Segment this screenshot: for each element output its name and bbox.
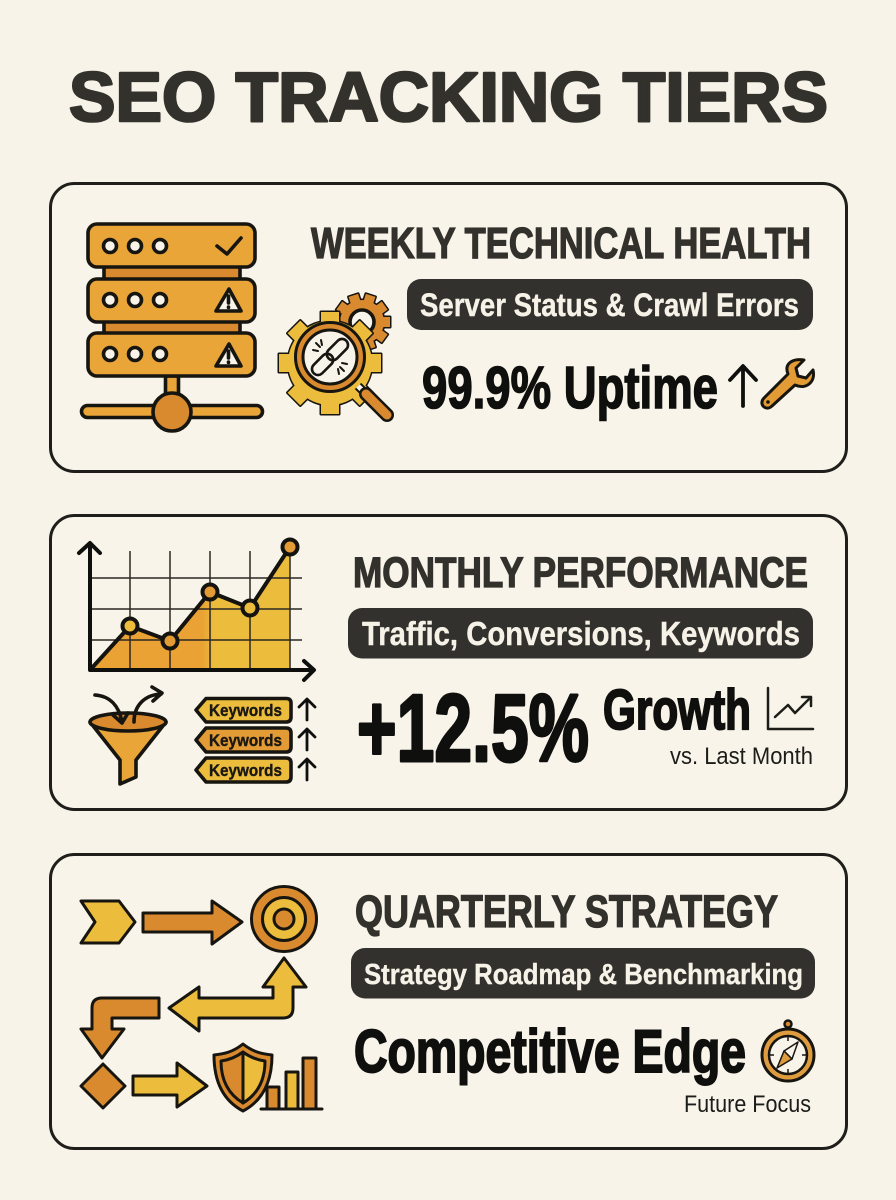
pill: roadmap: Strategy Roadmap & Benchmarking: [364, 959, 803, 991]
icon: wrench: [762, 360, 814, 408]
chart: growth line with area: [79, 540, 314, 680]
heading: MONTHLY PERFORMANCE: [353, 549, 808, 597]
pill: server status: Server Status & Crawl Errors: [420, 287, 799, 323]
title: SEO TRACKING TIERS: [69, 58, 828, 136]
panel: quarterly strategy: [50, 854, 846, 1148]
caption: Future Focus: [684, 1091, 811, 1118]
keyword tag 1: [196, 698, 291, 722]
icon: gears and magnifier with broken link: [279, 294, 390, 415]
pill: traffic: [348, 608, 813, 658]
icon: up arrow: [730, 366, 756, 406]
caption: vs. Last Month: [670, 743, 813, 770]
keyword tag 2: Keywords: [209, 731, 282, 750]
keyword tag 3: Keywords: [209, 761, 282, 780]
icons: keyword up arrows: [299, 699, 315, 780]
metric: growth percentage: +12.5%: [357, 675, 589, 782]
pill: server status: [407, 279, 813, 330]
icon: strategy flow diagram: [81, 886, 322, 1111]
keyword tag 2: [196, 728, 291, 752]
panel: weekly technical health: [50, 184, 846, 472]
icon: funnel: [90, 687, 166, 784]
pill: roadmap: [351, 948, 815, 998]
icon: trend chart: [768, 688, 813, 729]
icon: server rack: [82, 224, 262, 431]
keyword tag 1: Keywords: [209, 701, 282, 720]
metric: uptime: 99.9% Uptime: [422, 355, 718, 421]
metric: competitive edge: Competitive Edge: [354, 1018, 746, 1085]
pill: traffic: Traffic, Conversions, Keywords: [362, 615, 800, 652]
heading: QUARTERLY STRATEGY: [355, 886, 778, 937]
panel: monthly performance: [50, 516, 846, 810]
icon: compass: [762, 1020, 814, 1081]
keyword tag 3: [196, 758, 291, 782]
metric label: growth: Growth: [603, 678, 751, 742]
